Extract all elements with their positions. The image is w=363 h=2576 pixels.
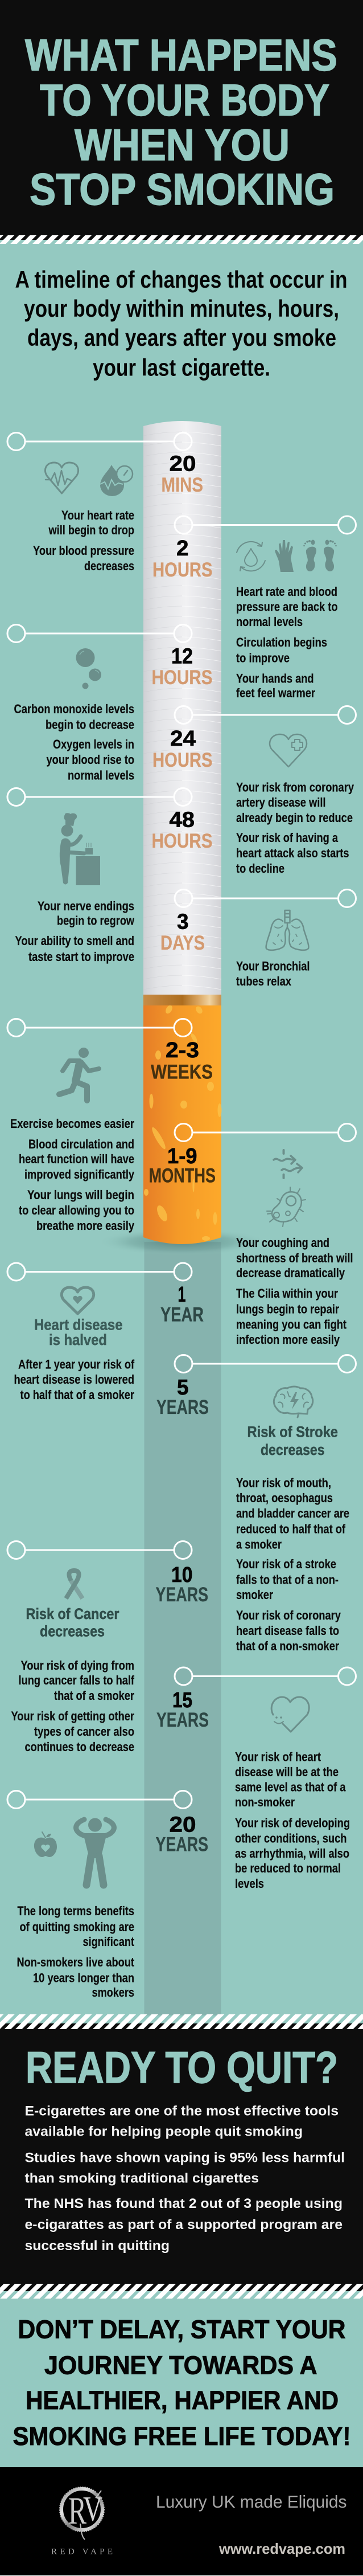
text block: normal levels <box>236 615 303 629</box>
cigarette <box>97 421 267 1256</box>
text block: feet feel warmer <box>236 686 315 700</box>
text block: pressure are back to <box>236 599 338 614</box>
text block: Your risk of getting other <box>11 1709 134 1723</box>
time label <box>156 1813 208 1856</box>
text block: Your coughing and <box>236 1236 329 1250</box>
heading <box>34 1316 123 1348</box>
heading <box>26 1605 119 1639</box>
text block: types of cancer also <box>34 1724 134 1739</box>
time label <box>156 1688 209 1731</box>
text block: Your Bronchial <box>236 959 310 973</box>
text block: Your risk of heart <box>235 1750 321 1764</box>
time label: YEAR <box>160 1303 204 1326</box>
text block: lungs begin to repair <box>236 1302 339 1316</box>
text block: Non-smokers live about <box>17 1955 134 1969</box>
panel: call to action <box>0 2284 363 2467</box>
text block: Your nerve endings <box>38 899 134 913</box>
logo: Red Vape: R <box>68 2489 86 2532</box>
icon: blood pressure drop <box>100 465 133 496</box>
heading: decreases <box>261 1441 324 1458</box>
text block: disease will be at the <box>235 1765 339 1779</box>
text block <box>33 508 134 573</box>
text block: Your blood pressure <box>33 543 134 558</box>
time label: 5 <box>177 1376 189 1400</box>
connector <box>7 1019 192 1037</box>
time label: YEARS <box>156 1396 209 1418</box>
panel: footer <box>0 2467 363 2576</box>
time label: 2 <box>176 537 189 561</box>
text block: decreases <box>84 559 134 573</box>
text block: Carbon monoxide levels <box>14 702 134 716</box>
text block: Circulation begins <box>236 635 327 649</box>
text block: available for helping people quit smoking <box>25 2124 303 2140</box>
panel: 2 hours <box>152 516 356 700</box>
connector <box>7 1541 192 1559</box>
text block: infection more easily <box>236 1332 340 1347</box>
time label: WEEKS <box>151 1061 213 1083</box>
text block: Studies have shown vaping is 95% less harmful <box>25 2150 345 2166</box>
icon: heart pulse <box>45 463 79 493</box>
text block: Your risk of dying from <box>20 1658 134 1673</box>
time label: 48 <box>170 808 195 832</box>
connector <box>175 706 356 723</box>
time label: 24 <box>170 727 196 751</box>
logo: Red Vape: V <box>83 2490 102 2529</box>
time label: 2-3 <box>166 1038 199 1062</box>
time label: HOURS <box>151 667 213 689</box>
connector <box>175 516 356 534</box>
connector <box>7 624 192 643</box>
panel: 48 hours <box>7 788 213 964</box>
time label: MONTHS <box>149 1164 216 1187</box>
icon: runner <box>59 1048 99 1101</box>
time label <box>156 1376 209 1418</box>
panel: header <box>0 0 363 244</box>
icon: strong person <box>76 1818 114 1885</box>
text block: continues to decrease <box>25 1740 134 1754</box>
text block: breathe more easily <box>36 1219 134 1233</box>
text block: E-cigarettes are one of the most effective tools <box>25 2103 339 2119</box>
text block: smokers <box>92 1985 134 2000</box>
time label: YEARS <box>156 1709 209 1731</box>
text block: The long terms benefits <box>17 1904 134 1918</box>
time label: 15 <box>172 1688 192 1712</box>
time label: 1-9 <box>167 1144 197 1168</box>
text block: be reduced to normal <box>235 1861 341 1875</box>
icon: apple <box>34 1832 57 1857</box>
icon: circulation <box>237 542 265 571</box>
time label: HOURS <box>152 749 213 771</box>
text block: a smoker <box>236 1537 282 1552</box>
time label: HOURS <box>151 830 213 852</box>
closing statement: DON’T DELAY, START YOUR <box>18 2315 346 2344</box>
text block: than smoking traditional cigarettes <box>25 2170 259 2186</box>
time label <box>151 808 213 852</box>
text block <box>236 1236 353 1347</box>
time label <box>149 1144 216 1187</box>
time label: 20 <box>170 1813 196 1837</box>
panel: 15 years <box>156 1667 356 1891</box>
text block: Exercise becomes easier <box>10 1117 134 1131</box>
connector <box>175 1667 356 1685</box>
text block <box>10 1117 134 1233</box>
icon: bacterium <box>267 1187 306 1226</box>
title: STOP SMOKING <box>30 164 335 214</box>
text block <box>236 1475 349 1653</box>
time label: HOURS <box>152 559 213 581</box>
text block: falls to that of a non- <box>236 1572 339 1587</box>
time label <box>160 1283 204 1326</box>
panel: 2-3 weeks <box>7 1019 213 1233</box>
panel: 20 minutes <box>7 433 203 573</box>
icon: hand <box>275 540 294 572</box>
panel: 1 year <box>7 1263 204 1402</box>
text block <box>15 899 134 964</box>
text block: levels <box>235 1876 264 1891</box>
text block: e-cigarattes as part of a supported program are <box>25 2217 343 2232</box>
text block: that of a non-smoker <box>236 1639 339 1653</box>
closing statement: JOURNEY TOWARDS A <box>44 2350 317 2380</box>
title: WHEN YOU <box>75 120 290 170</box>
panel: 20 years <box>7 1791 208 2000</box>
text block <box>17 1904 134 2000</box>
heading: Heart disease <box>34 1316 123 1333</box>
text block: will begin to drop <box>48 523 134 537</box>
time label: 20 <box>170 452 196 476</box>
time label <box>152 537 213 581</box>
connector <box>175 1123 356 1142</box>
icon: chef cooking <box>60 813 100 885</box>
text block: improved significantly <box>24 1167 134 1181</box>
heading: decreases <box>40 1622 105 1639</box>
connector <box>175 1355 356 1373</box>
text block: heart disease falls to <box>236 1624 339 1638</box>
text block: taste start to improve <box>28 950 134 964</box>
time label <box>162 452 203 496</box>
text block <box>236 780 354 876</box>
text block: heart function will have <box>19 1152 134 1166</box>
tagline: Luxury UK made Eliquids <box>156 2492 347 2512</box>
text block: of quitting smoking are <box>19 1920 134 1934</box>
text block: Your heart rate <box>61 508 134 522</box>
time label: YEARS <box>156 1584 208 1606</box>
text block <box>14 1357 134 1402</box>
text block: to decline <box>236 861 284 876</box>
time label <box>151 645 213 689</box>
closing statement: HEALTHIER, HAPPIER AND <box>26 2386 339 2415</box>
text block: Your risk of coronary <box>236 1608 341 1622</box>
icon: ribbon <box>66 1571 82 1598</box>
text block <box>235 1750 350 1891</box>
text block: begin to decrease <box>46 718 134 731</box>
text block: normal levels <box>68 768 134 783</box>
text block: throat, oesophagus <box>236 1491 333 1505</box>
logo: Red Vape: RED VAPE <box>51 2548 113 2557</box>
icon: heart with smiley <box>271 1697 309 1732</box>
text block: heart disease is lowered <box>14 1372 134 1387</box>
panel: 10 years <box>7 1541 208 1754</box>
title <box>25 30 337 214</box>
time label <box>152 727 213 771</box>
text block: The Cilia within your <box>236 1286 338 1301</box>
text block: Your lungs will begin <box>27 1188 134 1202</box>
panel: 24 hours <box>152 706 356 876</box>
subtitle <box>15 266 347 381</box>
closing statement <box>13 2315 350 2451</box>
connector <box>7 433 192 450</box>
text block: Heart rate and blood <box>236 584 337 599</box>
text block <box>25 2103 345 2254</box>
text block: Your risk of mouth, <box>236 1475 331 1490</box>
time label: DAYS <box>160 932 205 954</box>
heading: is halved <box>49 1331 107 1348</box>
text block: begin to regrow <box>57 914 134 927</box>
text block <box>14 702 134 783</box>
heading <box>247 1423 338 1458</box>
connector <box>175 890 356 907</box>
text block: tubes relax <box>236 974 291 988</box>
icon: lungs <box>266 910 308 950</box>
time label: 12 <box>171 645 193 669</box>
text block <box>236 584 338 700</box>
text block: your blood rise to <box>47 753 134 767</box>
text block: smoker <box>236 1588 273 1602</box>
time label <box>160 910 205 954</box>
panel: ready to quit <box>0 2014 363 2299</box>
text block <box>236 959 310 988</box>
heading: Risk of Cancer <box>26 1605 119 1622</box>
connector <box>7 788 192 805</box>
icon: bubbles <box>76 648 101 689</box>
time label: 10 <box>171 1563 192 1587</box>
text block: non-smoker <box>235 1795 295 1809</box>
logo: Red Vape <box>51 2487 113 2557</box>
subtitle: your last cigarette. <box>93 354 270 381</box>
connector <box>7 1263 192 1281</box>
heading: Risk of Stroke <box>247 1423 338 1440</box>
text block: to clear allowing you to <box>19 1203 134 1217</box>
time label: YEARS <box>156 1833 208 1856</box>
panel: 12 hours <box>7 624 213 783</box>
time label: 3 <box>177 910 189 934</box>
time label: MINS <box>162 474 203 496</box>
text block: After 1 year your risk of <box>18 1357 134 1372</box>
icon: heart <box>61 1287 94 1314</box>
text block: 10 years longer than <box>33 1971 134 1985</box>
text block: Your ability to smell and <box>15 934 134 948</box>
text block: Blood circulation and <box>28 1137 134 1151</box>
website: www.redvape.com <box>218 2540 345 2557</box>
icon: feet <box>303 540 337 571</box>
text block: to half that of a smoker <box>20 1388 134 1402</box>
connector <box>7 1791 192 1808</box>
text block: significant <box>83 1935 134 1949</box>
text block: Your risk of having a <box>236 831 338 845</box>
time label: 1 <box>178 1283 185 1307</box>
text block <box>11 1658 134 1754</box>
text block: that of a smoker <box>54 1688 134 1703</box>
text block: Oxygen levels in <box>53 737 134 751</box>
text block: The NHS has found that 2 out of 3 people using <box>25 2196 343 2211</box>
icon: heart with plus <box>270 734 307 767</box>
time label <box>156 1563 208 1606</box>
background column <box>145 1242 221 2015</box>
icon: brain <box>274 1387 313 1417</box>
panel: 3 days <box>160 890 356 988</box>
time label <box>151 1038 213 1083</box>
text block: Your hands and <box>236 671 314 686</box>
panel: 1-9 months <box>149 1123 356 1347</box>
text block: artery disease will <box>236 795 325 809</box>
icon: flowing arrows <box>274 1150 302 1178</box>
text block: successful in quitting <box>25 2238 170 2254</box>
panel: 5 years <box>156 1355 356 1653</box>
text block: Your risk of a stroke <box>236 1557 336 1571</box>
text block: lung cancer falls to half <box>18 1673 134 1687</box>
text block: to improve <box>236 651 290 665</box>
